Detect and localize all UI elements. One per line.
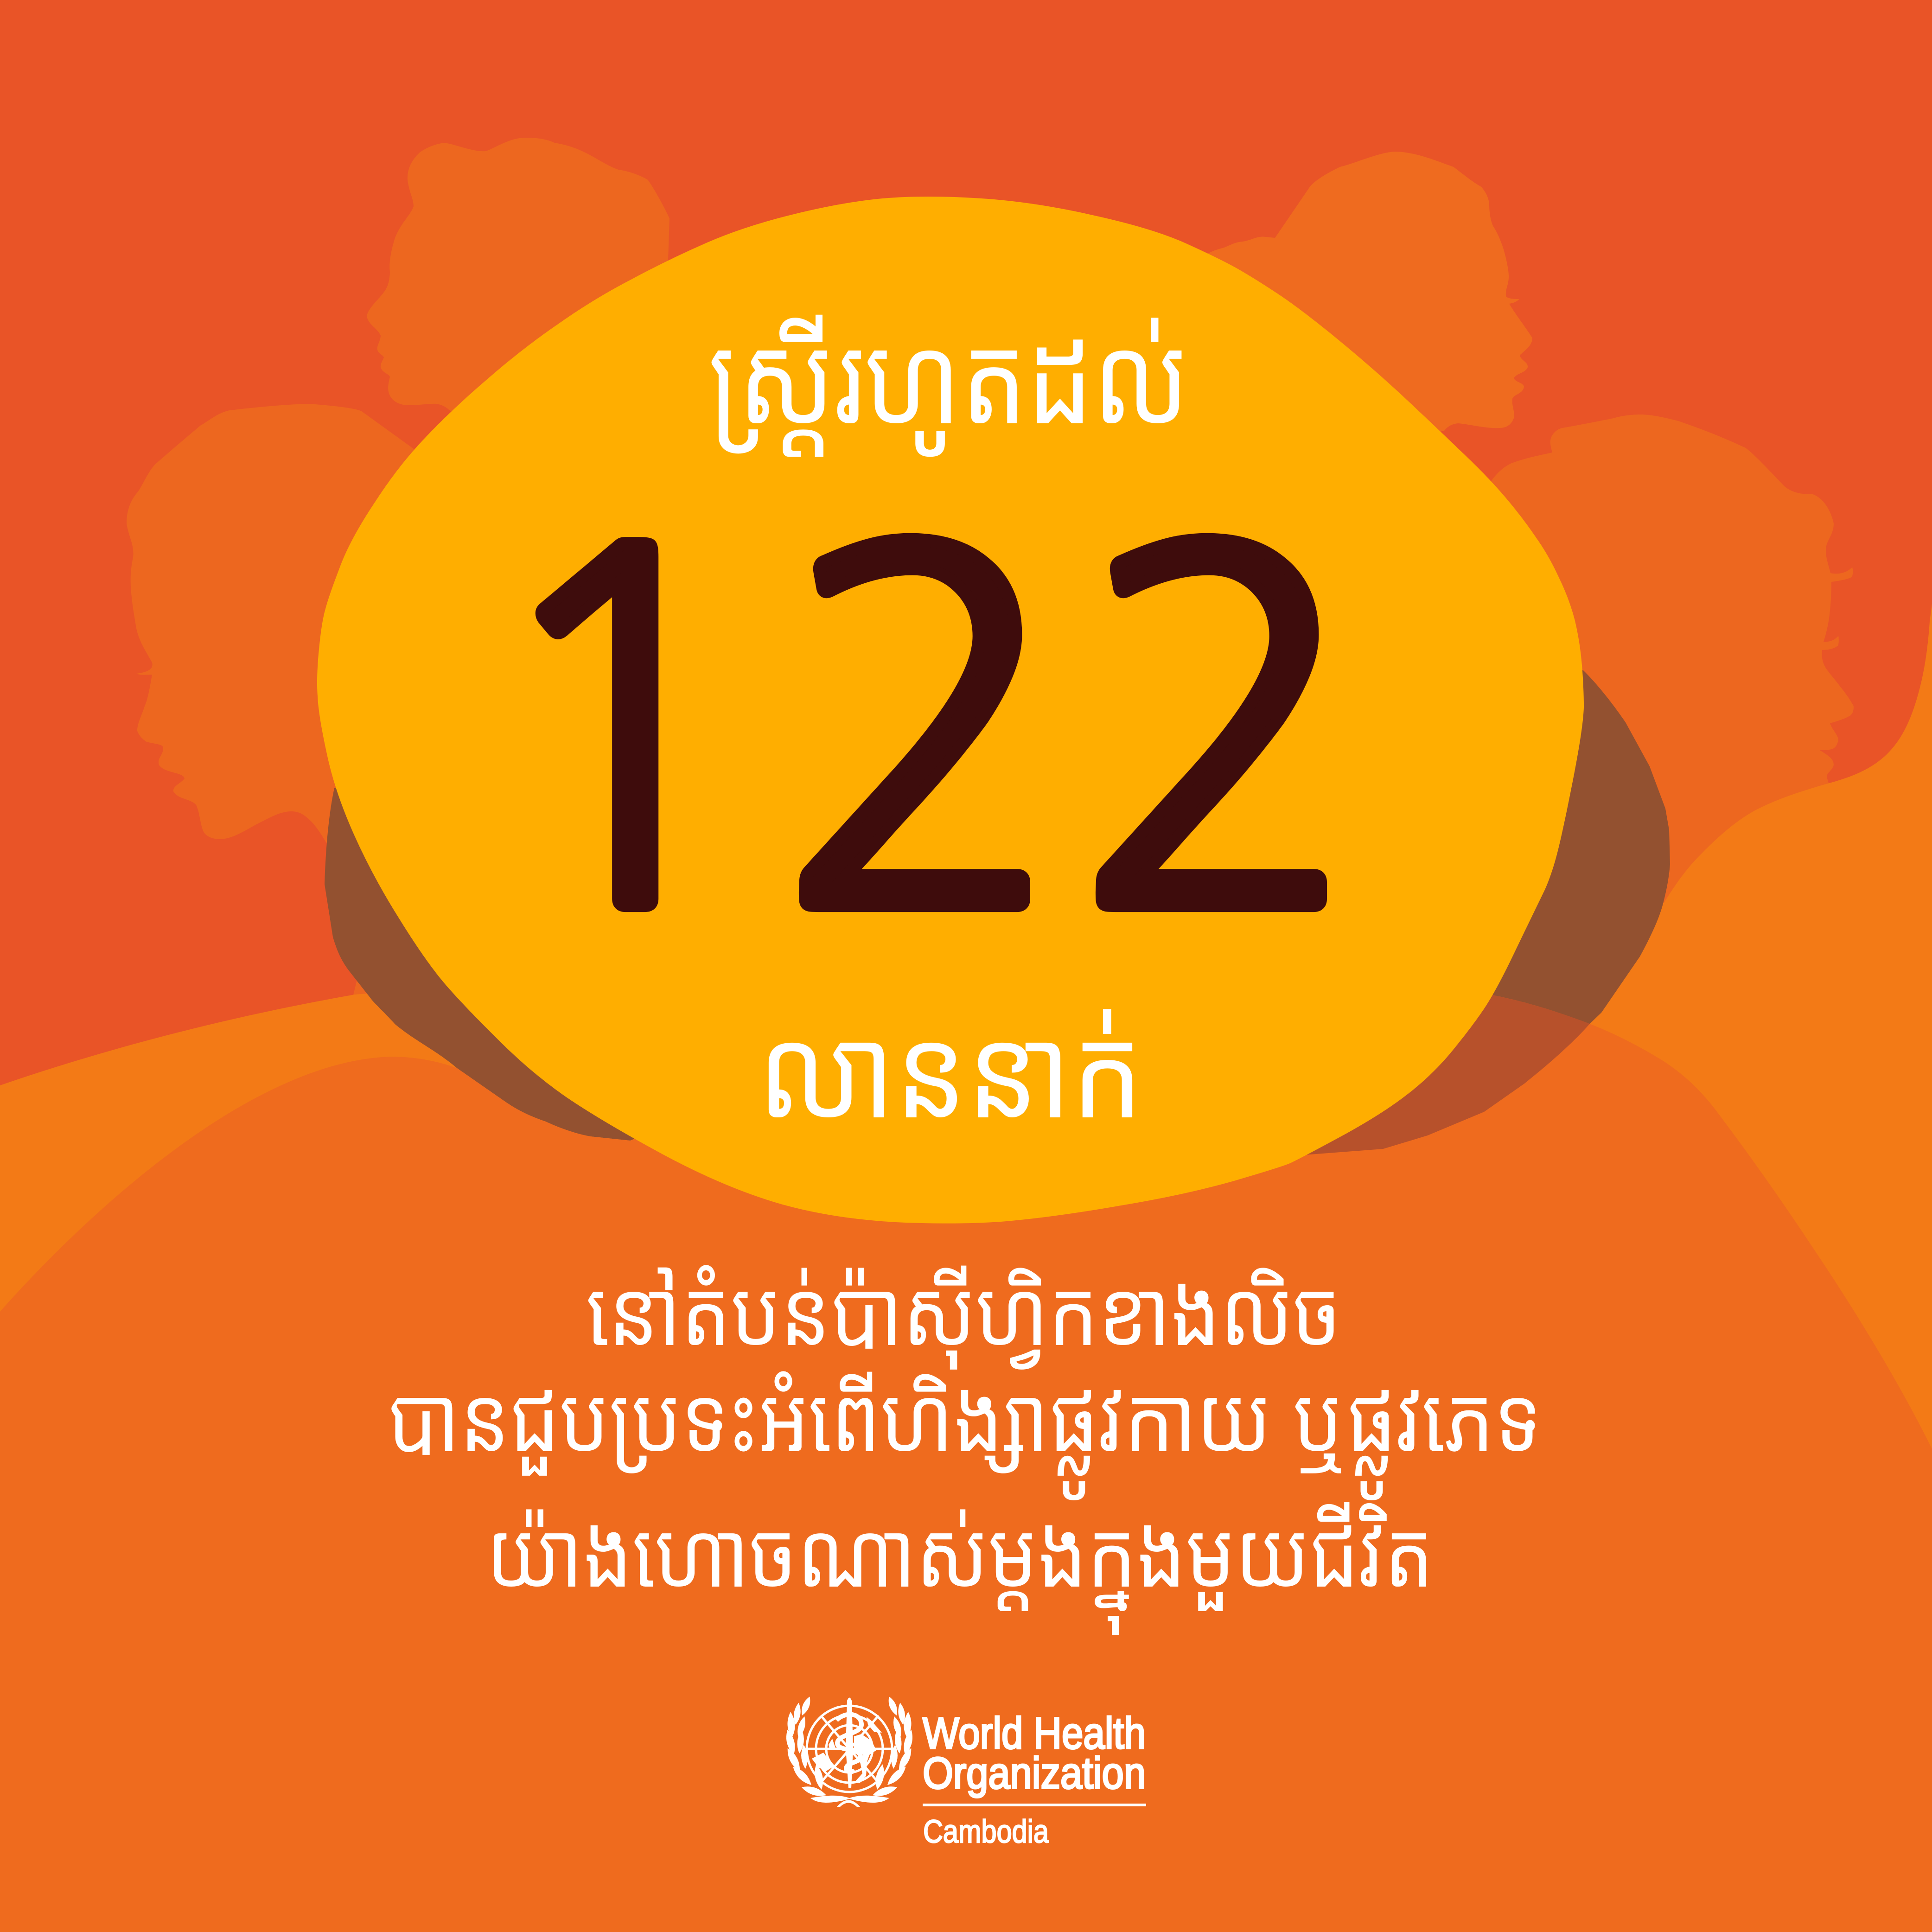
silhouette: woman top right [1205, 152, 1532, 464]
staff [846, 1698, 853, 1788]
silhouette sliver lower left [353, 980, 371, 997]
shadow behind central blob [325, 603, 1670, 1205]
big number 122: 122 [473, 489, 1366, 974]
heading: women up to: ស្ត្រីរហូតដល់ [708, 311, 1189, 458]
icon: WHO emblem [784, 1696, 915, 1807]
body line 2: បានជួបប្រទះអំពើហិង្សាផ្លូវកាយ ឬផ្លូវភេទ [388, 1369, 1541, 1500]
logo text: Organization: Organization [923, 1748, 1146, 1798]
logo divider [923, 1804, 1146, 1806]
logo text: World Health: World Health [923, 1709, 1146, 1758]
continents [812, 1717, 882, 1783]
logo: WHO Cambodia [784, 1696, 1146, 1849]
body line 3: យ៉ាងហោចណាស់ម្តងក្នុងមួយជីវិត [486, 1502, 1434, 1635]
snake [836, 1715, 861, 1772]
central yellow blob [317, 197, 1584, 1224]
logo text: Cambodia: Cambodia [923, 1813, 1049, 1849]
body text [388, 1263, 1541, 1635]
ribbon [810, 1796, 889, 1807]
unit: million people: លាននាក់ [758, 1002, 1143, 1145]
body line 1: នៅតំបន់ប៉ាស៊ីហ្វិកខាងលិច [586, 1263, 1341, 1370]
silhouette: woman left [127, 404, 464, 843]
silhouette: woman right [1391, 414, 1854, 1113]
hill: main orange foreground [0, 995, 1932, 1932]
shadow over the main hill [1252, 995, 1590, 1159]
laurel right [872, 1696, 915, 1799]
hill: light orange back hill [0, 604, 1932, 1932]
laurel left [784, 1696, 827, 1799]
silhouette: woman top left [367, 138, 695, 417]
